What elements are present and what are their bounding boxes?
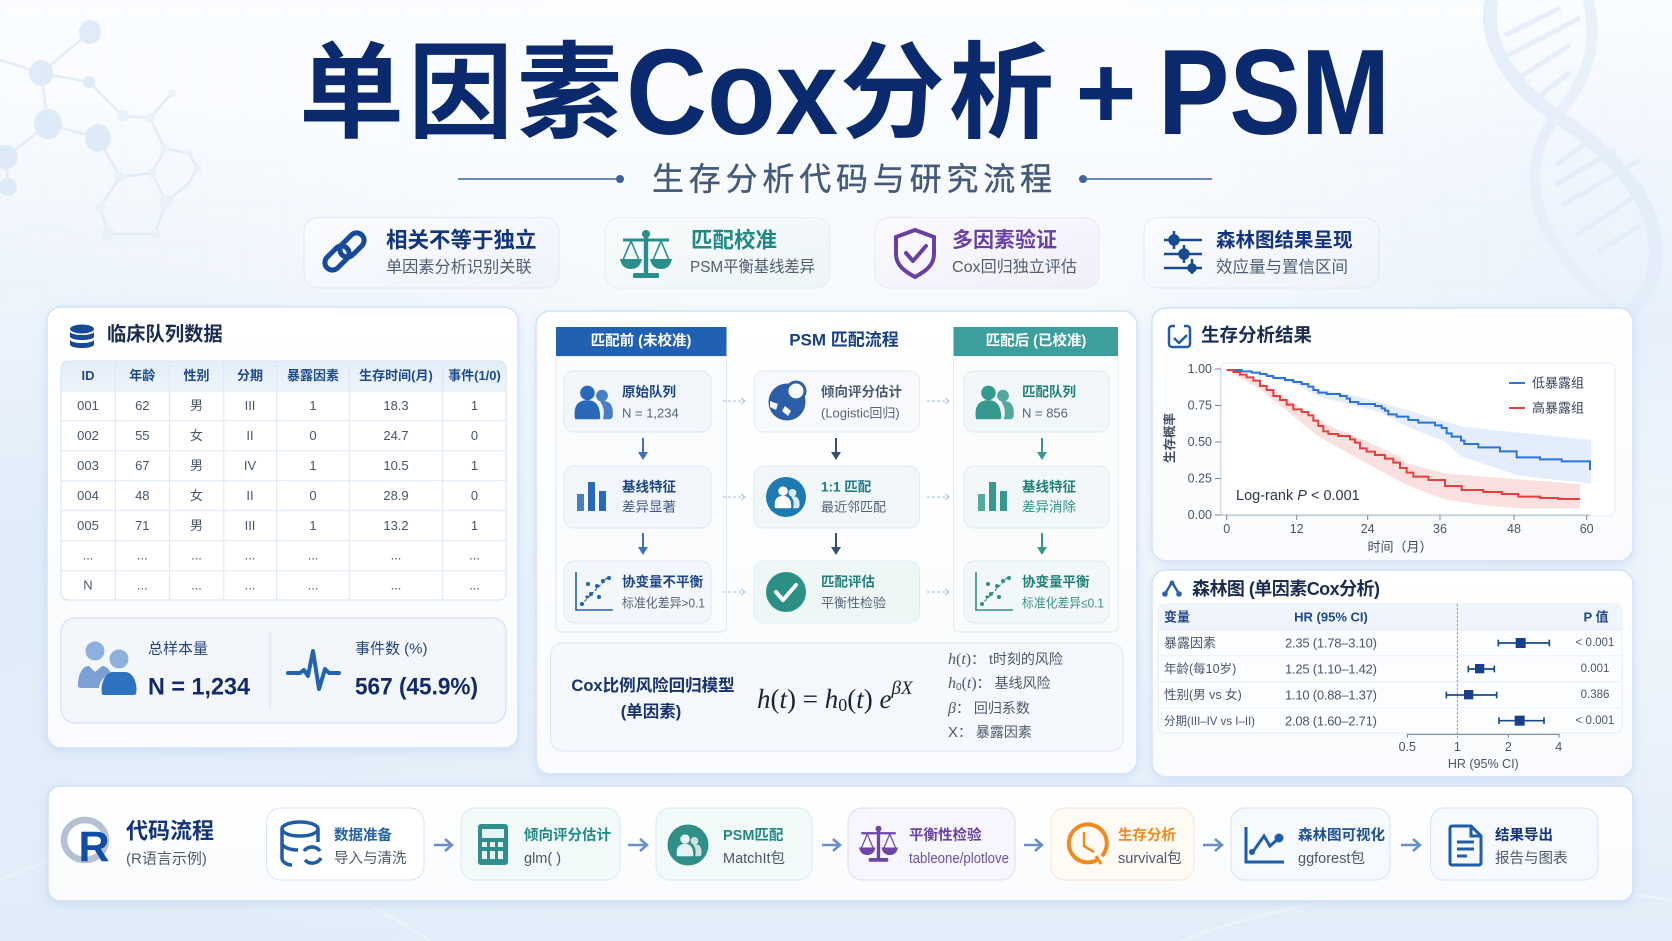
data table: ...	[83, 548, 93, 562]
icon: document	[1450, 826, 1481, 865]
pill: multivariate	[875, 218, 1099, 288]
data table: 男	[190, 458, 203, 473]
decoration: DNA helix	[1490, 0, 1656, 320]
panel: forest plot	[1152, 570, 1633, 777]
icon: people	[575, 386, 613, 419]
card: match evaluation	[754, 561, 920, 623]
card: 1:1 matching: 1:1 匹配	[821, 480, 872, 494]
data table: ...	[137, 578, 148, 592]
forest table: 性别(男 vs 女)	[1164, 687, 1242, 702]
formula box: (单因素)	[621, 702, 681, 721]
axis labels: 24	[1361, 522, 1375, 536]
equation legend: 0	[956, 682, 962, 692]
title: PSM	[1158, 24, 1390, 160]
card: baseline after: 基线特征	[1022, 478, 1076, 494]
data table: 0	[471, 488, 478, 503]
arrow	[822, 839, 840, 851]
data table: 暴露因素	[287, 368, 339, 383]
icon: pulse	[288, 651, 339, 689]
arrow	[1024, 839, 1042, 851]
icon: database sync	[282, 822, 321, 865]
pill: forest	[1144, 218, 1379, 288]
heading: PSM flow: PSM 匹配流程	[789, 330, 899, 350]
forest table: 1.10 (0.88–1.37)	[1285, 688, 1377, 702]
Kaplan-Meier chart	[1162, 362, 1615, 554]
icon: balance scale	[620, 230, 672, 278]
legend: 高暴露组	[1532, 400, 1584, 416]
axis labels: 1.00	[1188, 362, 1212, 376]
data table: ID	[82, 368, 94, 383]
title	[299, 24, 1390, 160]
step: export: 结果导出	[1495, 826, 1553, 844]
data table: 男	[190, 398, 203, 413]
data table: 55	[135, 428, 150, 443]
step: propensity: 倾向评分估计	[524, 827, 611, 844]
survival curves	[1227, 370, 1591, 508]
data table: ...	[191, 578, 202, 592]
data table: 1	[471, 458, 478, 473]
card: original cohort: 原始队列	[622, 384, 676, 400]
forest table: 0.001	[1581, 663, 1609, 675]
icon: tree	[1162, 580, 1182, 597]
data table	[61, 361, 506, 600]
data table: 年龄	[129, 368, 155, 383]
forest table: HR (95% CI)	[1294, 610, 1368, 624]
icon: sliders	[1164, 231, 1202, 274]
axis labels: 48	[1507, 522, 1521, 536]
legend	[1509, 376, 1584, 416]
forest table: P 值	[1583, 610, 1609, 624]
card: imbalance: 协变量不平衡	[622, 574, 703, 590]
equation: t) e	[856, 684, 891, 714]
step: data: 数据准备	[334, 826, 392, 844]
data table: 003	[77, 458, 99, 473]
data table: ...	[308, 548, 318, 562]
icon: shield check	[896, 230, 934, 277]
equation: 0	[838, 695, 847, 715]
pill: multivariate: Cox回归独立评估	[952, 258, 1077, 276]
forest table: 2.08 (1.60–2.71)	[1285, 714, 1377, 728]
data table: 0	[309, 488, 317, 503]
column: after matching	[954, 327, 1118, 632]
card: 1:1 matching	[754, 466, 920, 528]
pill: forest: 效应量与置信区间	[1216, 258, 1348, 276]
summary stats: 567 (45.9%)	[355, 674, 478, 700]
data table: ...	[245, 548, 255, 562]
heading: 森林图 (单因素Cox分析)	[1192, 579, 1380, 599]
icon: scatter	[576, 572, 613, 610]
data table: ...	[308, 578, 318, 592]
step: survival: 生存分析	[1118, 826, 1176, 844]
icon: line chart	[1246, 827, 1284, 862]
title: Cox	[626, 24, 838, 160]
panel: code workflow	[48, 786, 1633, 901]
data table: 71	[135, 518, 150, 533]
data table: 005	[77, 518, 99, 533]
forest axis labels	[1399, 740, 1562, 771]
icon: scatter teal	[976, 572, 1013, 610]
icon: calculator	[478, 824, 508, 865]
forest table: < 0.001	[1576, 715, 1614, 727]
axis labels: 12	[1290, 522, 1304, 536]
card: matched cohort	[964, 371, 1109, 432]
data table: ...	[245, 578, 255, 592]
axis labels: 36	[1433, 522, 1447, 536]
card: baseline before	[564, 466, 711, 528]
card: balance: 标准化差异≤0.1	[1022, 596, 1104, 610]
panel: code workflow: (R语言示例)	[126, 850, 207, 868]
pill: forest: 森林图结果呈现	[1216, 230, 1353, 252]
forest axis labels: 2	[1505, 740, 1512, 754]
data table: ...	[137, 548, 148, 562]
icon: people teal	[976, 386, 1014, 419]
data table: ...	[191, 548, 202, 562]
card: imbalance: 标准化差异>0.1	[622, 596, 705, 610]
step: propensity: glm( )	[524, 851, 561, 867]
icon: chain link	[322, 230, 367, 273]
data table: 67	[135, 458, 150, 473]
icon: database	[70, 324, 94, 348]
step: survival	[1051, 808, 1194, 880]
step: data	[266, 808, 424, 880]
forest table	[1158, 604, 1622, 733]
data table: 生存时间(月)	[359, 368, 433, 383]
equation legend: X： 暴露因素	[948, 724, 1032, 740]
equation legend: t)： 基线风险	[967, 674, 1051, 692]
data table: 1	[309, 398, 317, 413]
step: export	[1430, 808, 1598, 880]
data table: 女	[190, 488, 203, 503]
data table: II	[246, 428, 254, 443]
data table: 性别	[183, 368, 210, 383]
axis labels: 生存概率	[1162, 413, 1177, 463]
pill: correlation: 相关不等于独立	[386, 228, 537, 252]
data table: 1	[471, 518, 478, 533]
icon: bars teal	[978, 482, 1007, 511]
data table: 1	[471, 398, 478, 413]
card: balance: 协变量平衡	[1022, 574, 1090, 590]
axis labels: 0.75	[1188, 398, 1212, 412]
subtitle	[458, 161, 1212, 197]
arrow	[1401, 839, 1420, 851]
title: 单因素	[299, 36, 626, 152]
pill: correlation: 单因素分析识别关联	[386, 258, 532, 276]
data table: 48	[135, 488, 150, 503]
pill: multivariate: 多因素验证	[952, 228, 1057, 252]
data table: IV	[244, 458, 256, 473]
equation legend: h(t)： t时刻的风险	[948, 650, 1063, 668]
data table: 0	[309, 428, 317, 443]
column: before matching: 匹配前 (未校准)	[591, 332, 692, 350]
data table: 分期	[237, 368, 263, 383]
card: 1:1 matching: 最近邻匹配	[821, 500, 886, 514]
forest table: 年龄(每10岁)	[1164, 661, 1236, 676]
heading: 代码流程	[126, 818, 214, 844]
data table: N	[83, 578, 93, 592]
data table: 13.2	[383, 518, 409, 533]
card: propensity score: (Logistic回归)	[821, 406, 900, 420]
title: 分析	[840, 36, 1058, 152]
axis labels: 0	[1223, 522, 1230, 536]
data table: 62	[135, 398, 150, 413]
log-rank: Log-rank P < 0.001	[1236, 488, 1360, 504]
data table: 28.9	[383, 488, 409, 503]
step: balance: tableone/plotlove	[909, 851, 1009, 867]
card: balance	[964, 561, 1109, 623]
data table: ...	[391, 578, 401, 592]
equation legend	[947, 650, 1063, 740]
panel: PSM workflow	[536, 311, 1137, 774]
arrows: vertical flow	[638, 438, 1047, 555]
pill: matching: PSM平衡基线差异	[690, 258, 815, 276]
data table: ...	[391, 548, 401, 562]
data table: 004	[77, 488, 99, 503]
step: PSM match: PSM匹配	[723, 827, 784, 844]
data table: 10.5	[383, 458, 409, 473]
forest axis labels: 0.5	[1399, 740, 1416, 754]
forest axis labels: 1	[1454, 740, 1461, 754]
subtitle: 生存分析代码与研究流程	[652, 161, 1057, 197]
summary stats: N = 1,234	[148, 674, 251, 700]
summary stats: 总样本量	[148, 640, 208, 658]
step: forest viz: ggforest包	[1298, 850, 1365, 867]
arrow	[434, 839, 452, 851]
card: propensity score	[754, 371, 920, 432]
decoration: molecule	[0, 20, 201, 298]
column: after matching: 匹配后 (已校准)	[986, 332, 1087, 350]
forest table: 暴露因素	[1164, 636, 1216, 650]
axis labels: 0.50	[1188, 435, 1212, 449]
step: export: 报告与图表	[1495, 850, 1568, 867]
forest table: < 0.001	[1576, 637, 1614, 649]
axis labels	[1162, 362, 1594, 554]
data table: ...	[469, 548, 480, 562]
step: forest viz	[1231, 808, 1390, 880]
data table: II	[246, 488, 254, 503]
forest table: 2.35 (1.78–3.10)	[1285, 636, 1377, 650]
icon: teal people circle	[668, 824, 708, 866]
axis labels: 60	[1580, 522, 1594, 536]
arrow	[628, 839, 647, 851]
forest table: 0.386	[1581, 689, 1609, 701]
heading: 生存分析结果	[1201, 324, 1313, 346]
axis labels: 0.25	[1188, 472, 1212, 486]
pill: matching	[605, 218, 830, 288]
column: before matching	[556, 327, 726, 632]
equation legend: β： 回归系数	[947, 700, 1030, 716]
step: survival: survival包	[1118, 850, 1182, 867]
data table: 24.7	[383, 428, 409, 443]
step: balance	[848, 808, 1015, 880]
icon: globe with magnifier	[768, 382, 806, 420]
data table: 18.3	[383, 398, 409, 413]
data table: 男	[190, 518, 203, 533]
data table: III	[245, 518, 255, 533]
equation legend: h	[948, 674, 956, 692]
icon: scales purple	[859, 826, 898, 862]
formula box	[550, 643, 1123, 751]
forest table: 变量	[1164, 610, 1190, 624]
arrow	[1203, 839, 1222, 851]
formula box: Cox比例风险回归模型	[571, 675, 735, 695]
card: baseline after	[964, 466, 1109, 528]
icon: check circle	[766, 572, 806, 612]
card: match evaluation: 匹配评估	[821, 574, 875, 590]
forest axis labels: 4	[1555, 740, 1562, 754]
forest axis labels: HR (95% CI)	[1448, 757, 1519, 771]
summary stats: 事件数 (%)	[355, 640, 428, 658]
equation legend: (	[962, 674, 967, 692]
card: matched cohort: 匹配队列	[1022, 384, 1076, 400]
step: PSM match: MatchIt包	[723, 850, 785, 867]
card: propensity score: 倾向评分估计	[821, 384, 902, 400]
card: baseline before: 基线特征	[622, 478, 676, 494]
step: data: 导入与清洗	[334, 850, 407, 867]
data table: 1	[309, 518, 317, 533]
data table: 002	[77, 428, 99, 443]
card: matched cohort: N = 856	[1022, 406, 1068, 420]
arrows: horizontal dashed flow	[723, 398, 949, 595]
card: original cohort	[564, 371, 711, 432]
title: +	[1076, 35, 1136, 151]
summary stats	[61, 618, 506, 723]
data table: 1	[309, 458, 317, 473]
step: forest viz: 森林图可视化	[1298, 826, 1385, 844]
forest table: 1.25 (1.10–1.42)	[1285, 662, 1377, 676]
card: imbalance	[564, 561, 711, 623]
icon: circle people	[766, 477, 806, 517]
card: baseline after: 差异消除	[1022, 500, 1076, 514]
forest markers and axis	[1407, 604, 1559, 738]
data table: 女	[190, 428, 203, 443]
card: baseline before: 差异显著	[622, 500, 676, 514]
axis labels: 时间（月）	[1367, 540, 1433, 554]
card: original cohort: N = 1,234	[622, 406, 679, 420]
step: propensity	[461, 808, 620, 880]
icon: chart check	[1169, 326, 1190, 347]
icon: R logo	[64, 820, 110, 871]
pill: matching: 匹配校准	[691, 228, 777, 252]
equation: βX	[890, 678, 914, 698]
data table: ...	[469, 578, 480, 592]
data table: 事件(1/0)	[448, 368, 501, 383]
panel: survival results	[1152, 308, 1633, 561]
axis labels: 0.00	[1188, 508, 1212, 522]
panel: clinical cohort data	[47, 307, 518, 748]
step: PSM match	[656, 808, 812, 880]
data table: III	[245, 398, 255, 413]
equation: (	[847, 684, 856, 714]
equation: h(t) = h	[757, 684, 838, 714]
legend: 低暴露组	[1532, 376, 1584, 390]
icon: clock	[1069, 824, 1107, 864]
icon: bars	[577, 482, 606, 511]
pill: correlation	[304, 218, 559, 288]
icon: patients	[78, 642, 137, 695]
heading: 临床队列数据	[107, 322, 223, 346]
step: balance: 平衡性检验	[909, 826, 982, 844]
forest table: 分期(III–IV vs I–II)	[1164, 714, 1255, 728]
card: match evaluation: 平衡性检验	[821, 596, 886, 610]
data table: 0	[471, 428, 478, 443]
data table: 001	[77, 398, 99, 413]
icon: R logo: R	[78, 823, 110, 871]
